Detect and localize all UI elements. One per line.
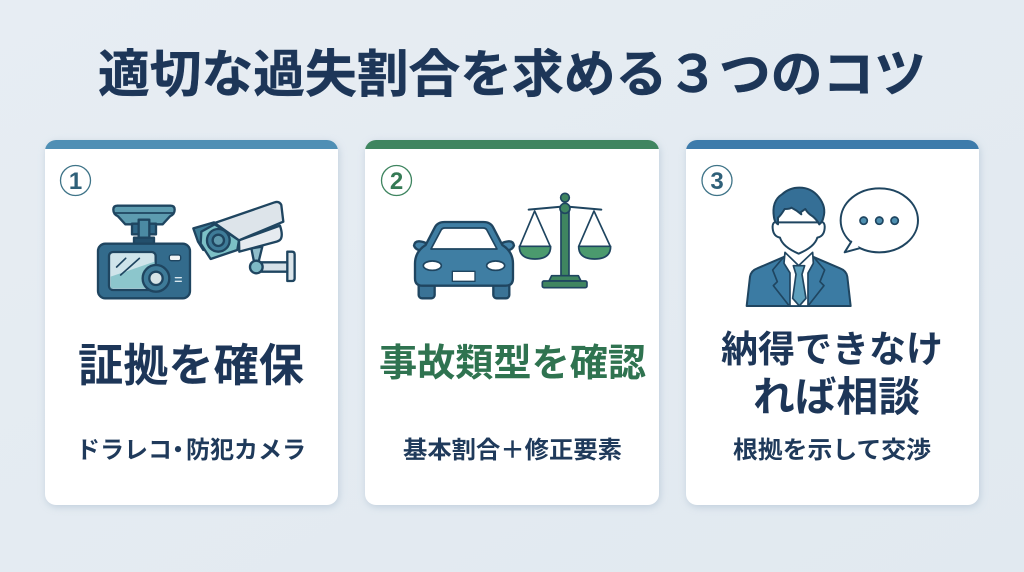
number badge 3: 3 <box>710 168 724 195</box>
subtext: 防犯カメラ <box>186 437 306 464</box>
number badge 3 <box>702 166 732 196</box>
heading: 事故類型を確認 <box>379 343 646 385</box>
heading: 証拠を確保 <box>78 340 304 391</box>
title: 適切な過失割合を求める３つのコツ <box>98 46 926 103</box>
number badge 2: 2 <box>390 168 403 195</box>
panel: accident type <box>365 140 659 505</box>
subtext: 基本割合＋修正要素 <box>403 437 622 464</box>
icon: car and scales <box>414 193 611 298</box>
subtext: ・ <box>166 437 190 464</box>
heading: 納得できなけ <box>721 329 943 370</box>
heading <box>721 329 943 420</box>
number badge 1: 1 <box>69 168 82 195</box>
number badge 2 <box>382 166 412 196</box>
number badge 1 <box>60 166 90 196</box>
subtext: 根拠を示して交渉 <box>733 437 931 464</box>
heading: れば相談 <box>753 374 920 420</box>
panel: evidence <box>45 140 338 505</box>
subtext: ドラレコ <box>76 437 172 464</box>
icon: advisor with speech bubble <box>747 188 918 306</box>
icon: dash camera and security camera <box>98 202 295 298</box>
panel: consultation <box>686 140 979 505</box>
